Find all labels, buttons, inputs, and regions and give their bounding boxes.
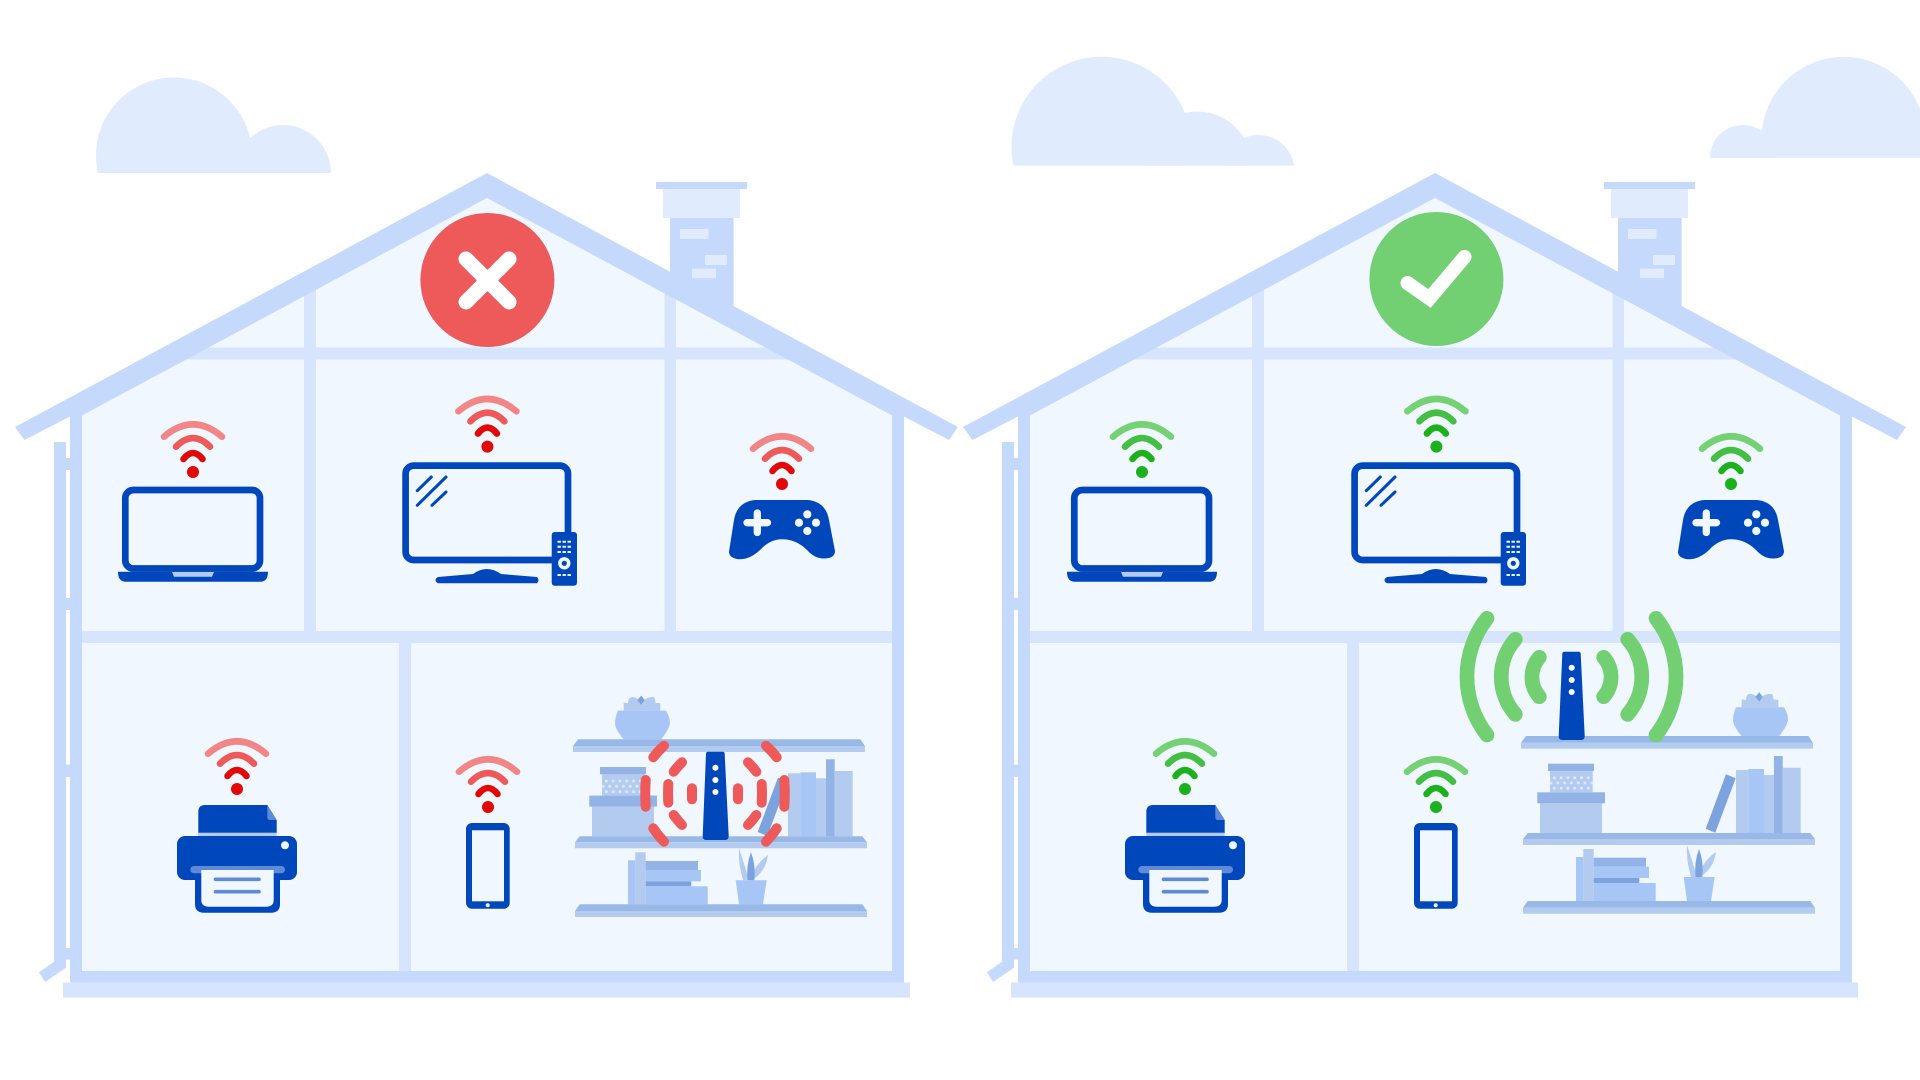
wifi: printer (1156, 741, 1214, 795)
stacked boxes (589, 767, 657, 836)
book stack (1576, 849, 1656, 901)
walls and floor beam (1018, 414, 1852, 982)
chimney (656, 182, 747, 320)
interior (82, 198, 892, 971)
bottom shelf (1523, 901, 1815, 914)
icon: printer (177, 805, 297, 913)
wifi: game controller (1702, 436, 1760, 490)
icon: game controller (729, 500, 835, 559)
chimney (1604, 182, 1695, 320)
floors and room dividers (1030, 280, 1840, 971)
leaning book (1706, 774, 1736, 833)
potted succulent (615, 696, 670, 739)
router: blocked by shelf (703, 752, 729, 840)
middle shelf (1523, 833, 1815, 845)
cloud: far right (1710, 57, 1920, 158)
foundation (1011, 982, 1858, 998)
small plant (736, 848, 768, 904)
interior (1030, 198, 1840, 971)
wifi: television (1407, 399, 1465, 453)
cloud: above right house (1012, 57, 1294, 166)
wifi: printer (208, 741, 266, 795)
middle shelf (575, 836, 867, 848)
roof (963, 173, 1906, 440)
wifi: game controller (753, 436, 811, 490)
wifi: phone (1407, 759, 1465, 813)
strong signal: right arcs (1604, 618, 1676, 735)
walls and floor beam (70, 414, 904, 982)
drain pipe (39, 442, 71, 982)
shelves with books and plants (573, 696, 867, 917)
router: open on top shelf (1559, 652, 1585, 740)
upright books (1736, 756, 1801, 833)
icon: phone (466, 823, 510, 909)
top shelf (573, 739, 865, 752)
icon: printer (1125, 805, 1245, 913)
foundation (63, 982, 910, 998)
house: good router placement (963, 173, 1906, 998)
cloud: left house (96, 77, 331, 173)
strong signal: left arcs (1467, 618, 1539, 735)
badge: check mark (1369, 212, 1503, 346)
wifi: laptop (1113, 424, 1171, 478)
icon: game controller (1678, 500, 1784, 559)
icon: television with remote (406, 466, 577, 586)
drain pipe (987, 442, 1019, 982)
small plant (1684, 845, 1716, 901)
book stack (628, 852, 708, 904)
wifi: television (458, 399, 516, 453)
icon: phone (1414, 823, 1458, 909)
wifi: phone (459, 759, 517, 813)
weak signal: right dashes (738, 746, 785, 842)
top shelf (1521, 736, 1813, 749)
roof (15, 173, 958, 440)
icon: television with remote (1355, 466, 1526, 586)
floors and room dividers (82, 280, 892, 971)
house: poor router placement (15, 173, 958, 998)
icon: laptop (118, 490, 268, 582)
wifi: laptop (164, 424, 222, 478)
potted succulent (1733, 692, 1788, 736)
upright books (788, 759, 853, 836)
weak signal: left dashes (645, 746, 692, 842)
icon: laptop (1067, 490, 1217, 582)
shelves with books and plants (1521, 692, 1815, 914)
stacked boxes (1537, 764, 1605, 833)
badge: cross (420, 213, 554, 347)
bottom shelf (575, 904, 867, 917)
leaning book (758, 778, 788, 836)
